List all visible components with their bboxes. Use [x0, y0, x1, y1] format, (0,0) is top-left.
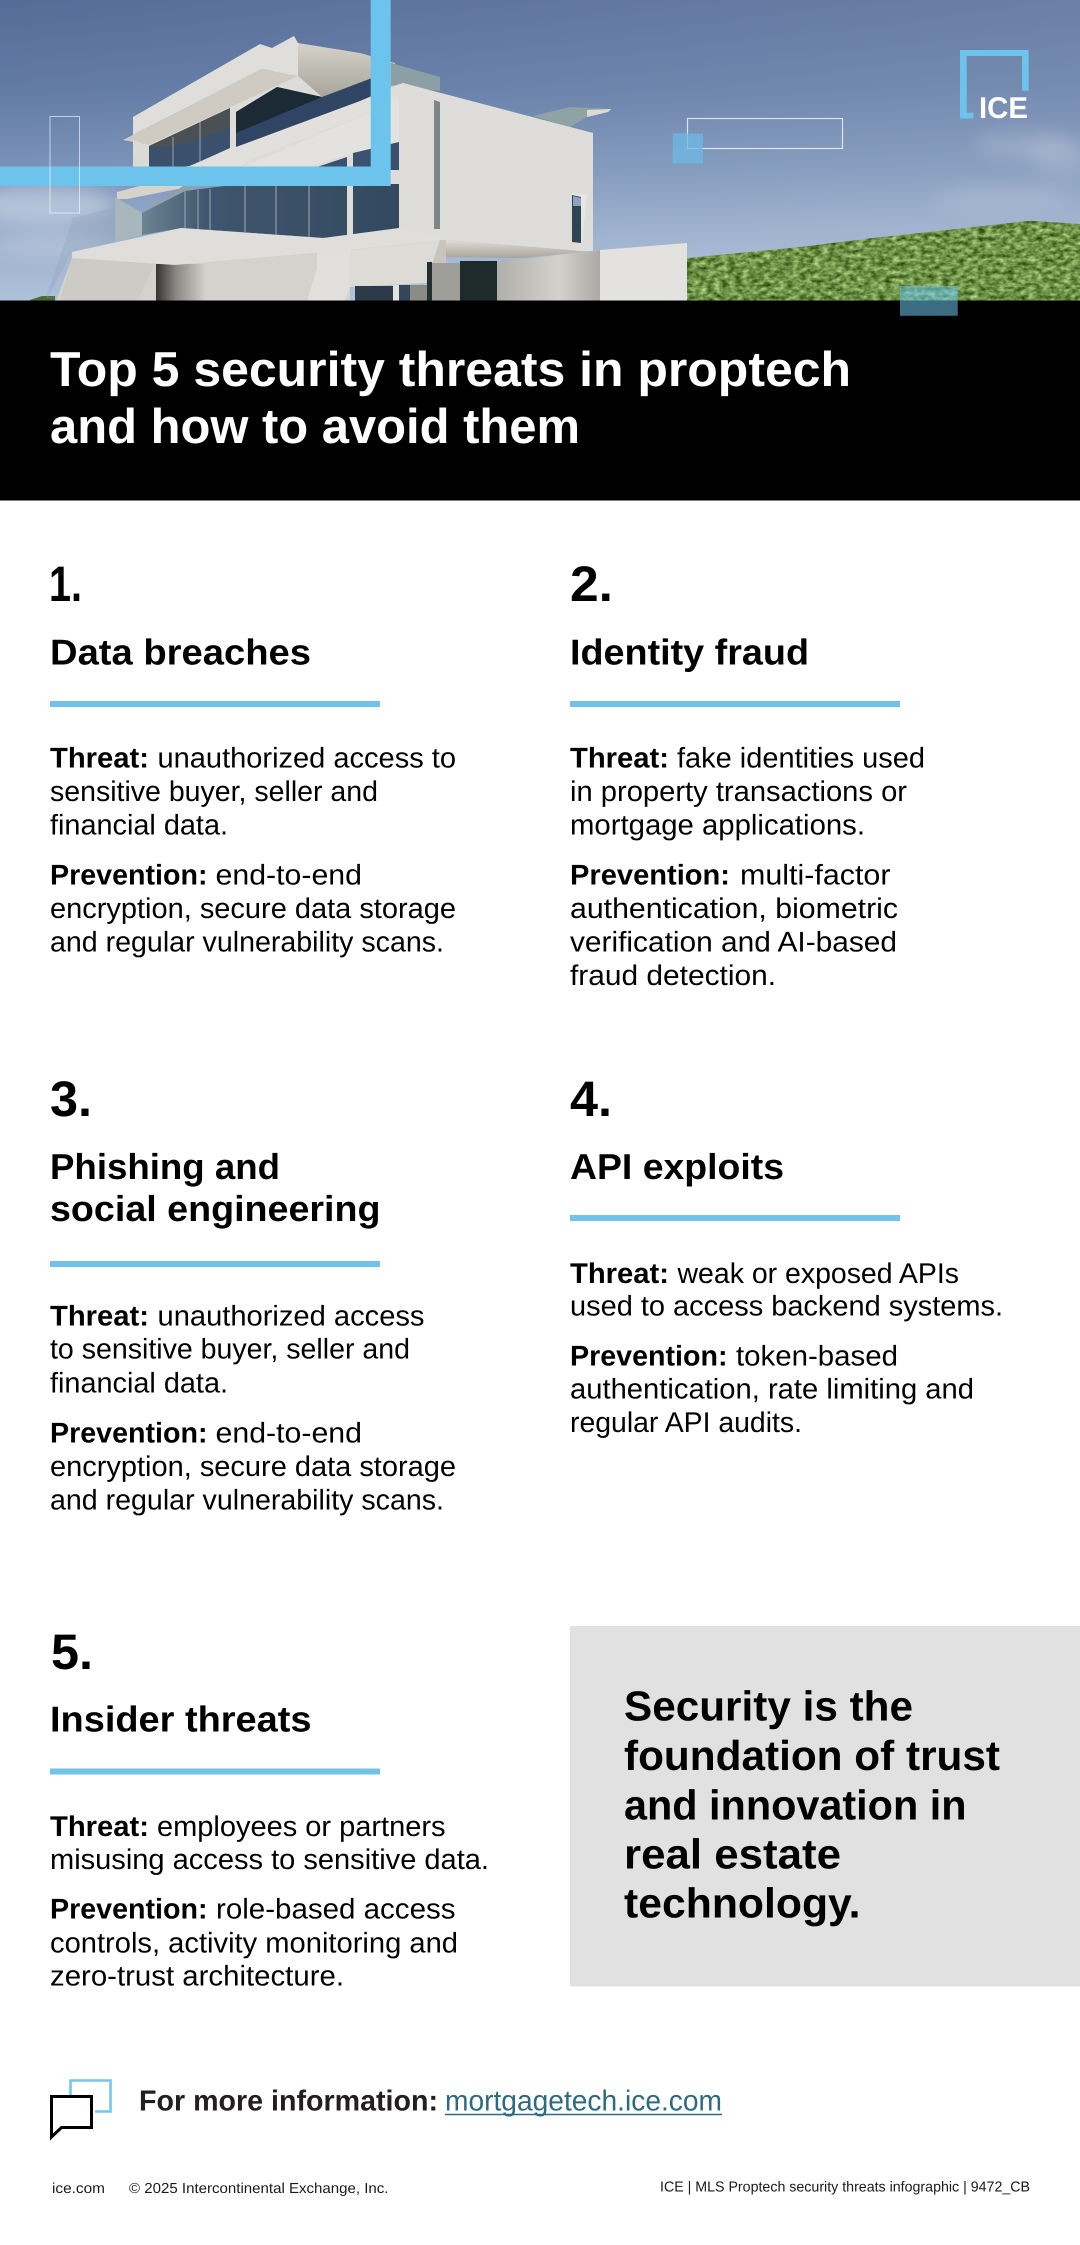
threat text: employees or partners: [157, 1811, 446, 1843]
title band: [0, 300, 1080, 500]
house: [46, 36, 687, 301]
prevention text: [50, 860, 456, 958]
panel: threat 5 insider threats: [50, 1624, 489, 1992]
prevention text: end-to-end: [216, 860, 362, 892]
callout: security statement: [570, 1626, 1080, 1986]
heading: API exploits: [570, 1146, 784, 1187]
panel: threat 3 phishing: [50, 1071, 456, 1516]
number 1: 1.: [49, 556, 82, 612]
threat text: [570, 1258, 1003, 1322]
rule: [50, 1261, 380, 1267]
prevention text: Prevention:: [50, 1418, 208, 1450]
icon: speech bubbles: [52, 2080, 110, 2137]
panel: threat 1 data breaches: [49, 556, 456, 958]
prevention text: [50, 1418, 456, 1516]
prevention text: multi-factor: [740, 860, 891, 892]
threat text: [50, 742, 456, 842]
icon: ICE logo: [960, 50, 1029, 125]
prevention text: [50, 1894, 458, 1992]
prevention text: verification and AI-based: [570, 926, 897, 958]
threat text: Threat:: [570, 1258, 669, 1290]
prevention text: Prevention:: [50, 860, 208, 892]
prevention text: encryption, secure data storage: [50, 1451, 456, 1483]
threat text: unauthorized access: [158, 1300, 424, 1332]
threat text: financial data.: [50, 1368, 228, 1400]
translucent blue square: [673, 134, 703, 164]
callout text: [624, 1682, 1000, 1927]
threat text: misusing access to sensitive data.: [50, 1844, 489, 1876]
threat text: Threat:: [50, 1811, 149, 1843]
grass hill: [30, 221, 1080, 301]
threat text: Threat:: [50, 1300, 149, 1332]
footer left: © 2025 Intercontinental Exchange, Inc.: [129, 2181, 388, 2197]
more information line: For more information:: [139, 2086, 438, 2118]
prevention text: Prevention:: [570, 1340, 728, 1372]
prevention text: encryption, secure data storage: [50, 893, 456, 925]
prevention text: Prevention:: [570, 860, 730, 892]
threat text: [50, 1300, 424, 1400]
threat text: [50, 1811, 489, 1876]
threat text: financial data.: [50, 810, 228, 842]
thin outline rectangle right: [688, 118, 842, 148]
title: [50, 343, 851, 454]
callout text: foundation of trust: [624, 1732, 1000, 1779]
prevention text: controls, activity monitoring and: [50, 1928, 458, 1960]
rule: [50, 701, 380, 707]
prevention text: regular API audits.: [570, 1407, 802, 1439]
number 5: 5.: [51, 1624, 93, 1680]
callout text: real estate: [624, 1831, 841, 1878]
prevention text: zero-trust architecture.: [50, 1960, 344, 1992]
number 4: 4.: [570, 1071, 612, 1127]
thin outline rectangle left: [50, 116, 80, 213]
rule: [570, 701, 900, 707]
prevention text: and regular vulnerability scans.: [50, 1484, 444, 1516]
heading: Data breaches: [50, 632, 311, 672]
callout text: and innovation in: [624, 1781, 966, 1828]
threat text: mortgage applications.: [570, 810, 865, 842]
threat text: Threat:: [50, 742, 149, 774]
prevention text: Prevention:: [50, 1894, 208, 1926]
threat text: used to access backend systems.: [570, 1290, 1003, 1322]
prevention text: role-based access: [216, 1894, 456, 1926]
title: Top 5 security threats in proptech: [50, 343, 851, 397]
panel: threat 4 API exploits: [570, 1071, 1003, 1439]
prevention text: authentication, rate limiting and: [570, 1374, 974, 1406]
panel: threat 2 identity fraud: [570, 556, 925, 992]
prevention text: [570, 1340, 974, 1439]
rule: [570, 1215, 900, 1221]
prevention text: token-based: [736, 1340, 898, 1372]
prevention text: authentication, biometric: [570, 893, 898, 925]
prevention text: and regular vulnerability scans.: [50, 926, 444, 958]
callout text: Security is the: [624, 1682, 913, 1730]
icon: ICE logo: ICE: [979, 92, 1028, 125]
number 2: 2.: [570, 556, 613, 612]
threat text: sensitive buyer, seller and: [50, 776, 378, 808]
heading: Identity fraud: [570, 632, 809, 672]
heading: [50, 1146, 380, 1229]
threat text: in property transactions or: [570, 776, 908, 808]
prevention text: end-to-end: [216, 1418, 362, 1450]
threat text: Threat:: [570, 742, 669, 774]
threat text: weak or exposed APIs: [677, 1258, 959, 1290]
threat text: [570, 742, 925, 842]
footer left: ice.com: [52, 2181, 105, 2197]
heading: social engineering: [50, 1188, 380, 1229]
decorative blue L-shaped frame: [0, 0, 391, 186]
heading: Phishing and: [50, 1146, 280, 1187]
threat text: to sensitive buyer, seller and: [50, 1334, 410, 1366]
prevention text: fraud detection.: [570, 960, 776, 992]
heading: Insider threats: [50, 1698, 312, 1740]
link: mortgagetech.ice.com: [445, 2086, 722, 2118]
title: and how to avoid them: [50, 400, 580, 454]
translucent square overlapping band: [900, 286, 958, 316]
number 3: 3.: [50, 1071, 92, 1127]
sky: [0, 0, 1080, 301]
hero photo: modern house against blue sky: [0, 0, 1080, 301]
threat text: unauthorized access to: [158, 742, 456, 774]
more information line: [139, 2086, 722, 2118]
footer right: ICE | MLS Proptech security threats infographic | 9472_CB: [660, 2180, 1030, 2196]
callout text: technology.: [624, 1880, 860, 1927]
rule: [50, 1768, 380, 1774]
prevention text: [570, 860, 898, 992]
threat text: fake identities used: [677, 742, 925, 774]
